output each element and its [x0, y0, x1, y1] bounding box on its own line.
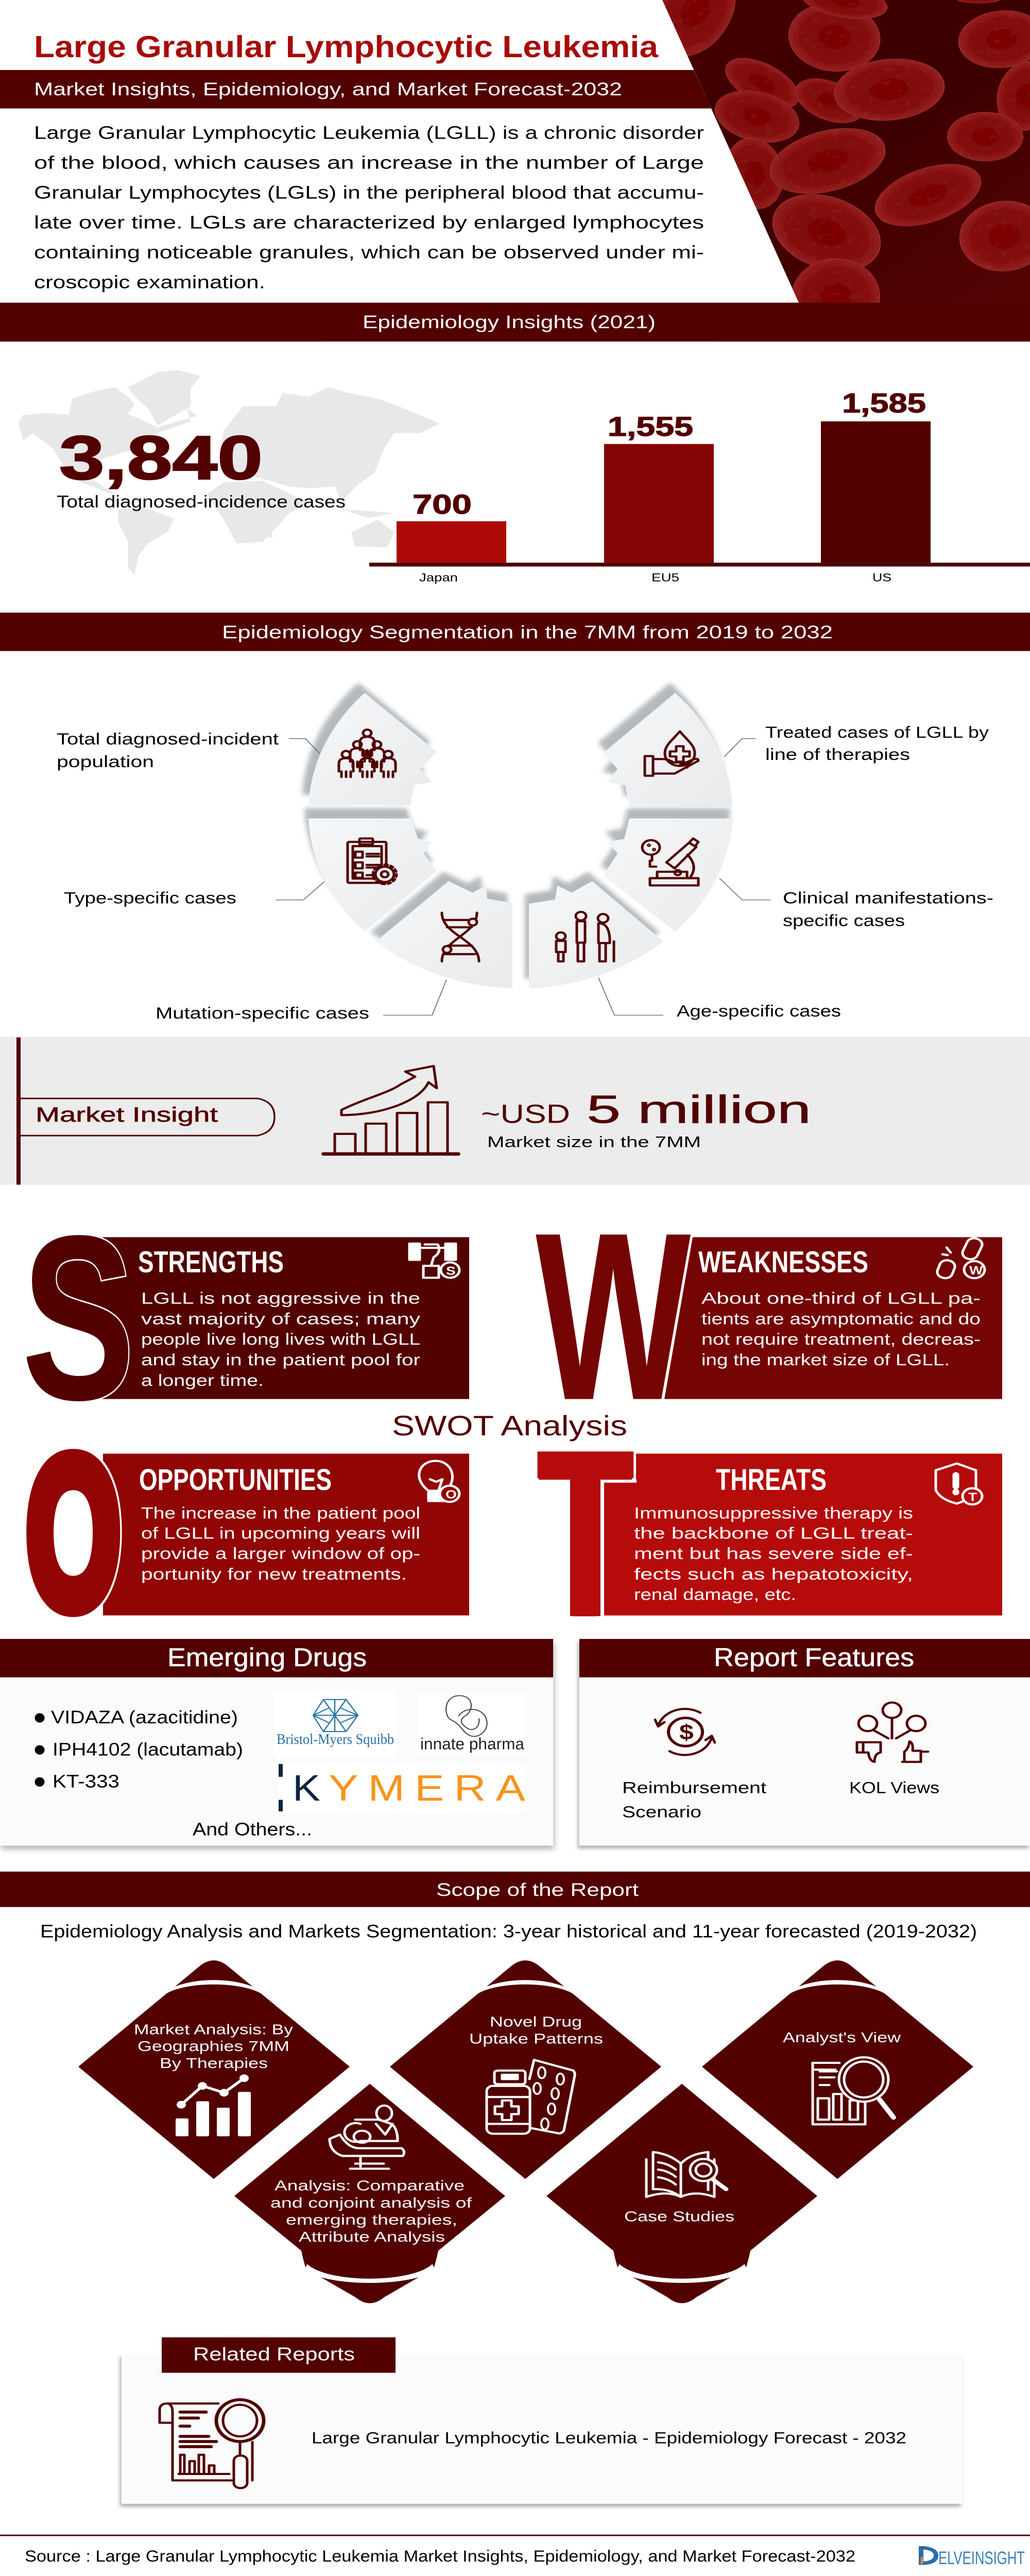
market insight tab [20, 1098, 274, 1136]
icon: reimbursement cycle: $ [679, 1720, 694, 1744]
icon: population pyramid [339, 730, 396, 777]
SWOT: strengths: LGLL is not aggressive in the [141, 1290, 420, 1308]
diamond: novel drug uptake: Uptake Patterns [469, 2031, 603, 2047]
SWOT: opportunities [26, 1414, 469, 1652]
diamond: comparative analysis: and conjoint analysis of [270, 2195, 472, 2211]
intro paragraph: late over time. LGLs are characterized by enlarged lymphocytes [34, 212, 704, 232]
labels: Total diagnosed-incident [57, 730, 279, 748]
diamond: market analysis [78, 1960, 350, 2179]
diamond: comparative analysis: Analysis: Comparative [274, 2178, 465, 2194]
SWOT: threats [536, 1400, 1002, 1668]
SWOT: weaknesses: not require treatment, decreas- [701, 1330, 981, 1348]
icon: light bulb: O [445, 1488, 457, 1501]
total cases label: Total diagnosed-incidence cases [57, 492, 346, 511]
segmented horseshoe diagram [57, 683, 993, 1022]
panel: report features: Scenario [622, 1803, 701, 1821]
logo: innate pharma [418, 1693, 525, 1755]
logo: Kymera [279, 1764, 525, 1811]
SWOT: weaknesses: WEAKNESSES [698, 1245, 868, 1279]
intro paragraph [34, 123, 704, 292]
scope subtitle: Epidemiology Analysis and Markets Segmentation: 3-year historical and 11-year forecasted (2019-2032) [40, 1922, 977, 1941]
SWOT: strengths: vast majority of cases; many [141, 1310, 421, 1328]
icon: warning shield [936, 1464, 982, 1504]
diamond: novel drug uptake: Novel Drug [490, 2014, 582, 2030]
icon: age groups family [556, 912, 614, 961]
SWOT heading: SWOT Analysis [392, 1410, 627, 1442]
SWOT: strengths: S [22, 1187, 135, 1449]
drug list: VIDAZA (azacitidine) [51, 1708, 238, 1727]
intro paragraph: of the blood, which causes an increase in the number of Large [34, 152, 704, 173]
icon: strength fist [409, 1244, 459, 1278]
header hero image: red blood cells [662, 0, 1030, 303]
SWOT: weaknesses: About one-third of LGLL pa- [701, 1290, 981, 1308]
related reports tab [162, 2337, 396, 2373]
section band: Epidemiology Segmentation [0, 613, 1030, 651]
icon: DNA [442, 913, 479, 961]
labels: specific cases [783, 911, 905, 930]
SWOT: strengths: and stay in the patient pool for [141, 1351, 420, 1369]
icon: microscope [642, 838, 698, 886]
icon: pill bottle and blister [487, 2060, 575, 2134]
subtitle band [0, 70, 711, 108]
diamond: analyst's view [702, 1960, 973, 2179]
bar chart: US [872, 572, 891, 584]
diamond: comparative analysis [234, 2084, 505, 2303]
world map background [19, 370, 440, 575]
icon: reimbursement cycle [655, 1709, 715, 1755]
SWOT: strengths: STRENGTHS [138, 1245, 284, 1279]
bar chart: EU5 [651, 572, 679, 584]
intro paragraph: Large Granular Lymphocytic Leukemia (LGLL) is a chronic disorder [34, 123, 704, 143]
drug list: IPH4102 (lacutamab) [53, 1740, 243, 1759]
labels: line of therapies [765, 745, 910, 764]
section band: Scope of the Report [0, 1872, 1030, 1907]
and others: And Others... [193, 1820, 312, 1839]
bar chart: 1,555 [608, 412, 693, 442]
panel: emerging drugs [0, 1639, 553, 1845]
logo: Kymera: K [293, 1768, 320, 1809]
bar chart: Japan [419, 572, 458, 584]
section band: Scope of the Report: Scope of the Report [436, 1879, 639, 1900]
title: Large Granular Lymphocytic Leukemia [34, 30, 659, 64]
labels: Age-specific cases [677, 1002, 841, 1020]
market value: 5 million [587, 1088, 811, 1131]
diamond: market analysis: By Therapies [160, 2056, 268, 2071]
panel: related reports [122, 2337, 963, 2504]
icon: strength fist: S [446, 1264, 456, 1278]
SWOT: weaknesses: ing the market size of LGLL. [701, 1351, 950, 1369]
emerging drugs heading: Emerging Drugs [167, 1643, 367, 1672]
icon: growth chart [323, 1066, 458, 1154]
diamond: market analysis: Geographies 7MM [138, 2039, 289, 2054]
icon: report with magnifier [160, 2400, 264, 2488]
letter T: T [536, 1400, 636, 1668]
header white panel [0, 0, 799, 303]
icon: book with magnifier [646, 2152, 726, 2197]
diamond: comparative analysis: emerging therapies, [286, 2213, 457, 2228]
SWOT: strengths [22, 1187, 469, 1449]
SWOT: threats: the backbone of LGLL treat- [634, 1524, 913, 1543]
diamond: comparative analysis: Attribute Analysis [299, 2230, 445, 2245]
intro paragraph: containing noticeable granules, which can be observed under mi- [34, 242, 704, 262]
SWOT: threats: renal damage, etc. [634, 1586, 796, 1604]
SWOT: opportunities: of LGLL in upcoming years will [141, 1524, 420, 1543]
drug list [35, 1708, 243, 1792]
labels: Mutation-specific cases [156, 1004, 369, 1022]
footer rule [0, 2535, 1030, 2536]
market size label: Market size in the 7MM [487, 1133, 701, 1151]
SWOT: threats: Immunosuppressive therapy is [634, 1504, 913, 1522]
diamond: market analysis: Market Analysis: By [134, 2022, 294, 2038]
section band: Epidemiology Segmentation: Epidemiology Segmentation in the 7MM from 2019 to 2032 [222, 622, 833, 642]
icon: checklist with gear [348, 838, 397, 884]
icon: broken link: W [969, 1264, 983, 1277]
market insight heading: Market Insight [36, 1104, 218, 1126]
icon: report with magnifier [813, 2057, 894, 2124]
market value: ~USD [481, 1099, 570, 1129]
icon: bar and line chart [176, 2074, 251, 2137]
SWOT: opportunities: OPPORTUNITIES [139, 1463, 332, 1497]
market value [481, 1088, 811, 1131]
diamond: analyst's view: Analyst's View [783, 2030, 901, 2046]
SWOT: weaknesses [536, 1183, 1002, 1450]
logo: Bristol-Myers Squibb [274, 1690, 396, 1758]
bar chart: 1,585 [842, 388, 926, 418]
SWOT: opportunities: O [26, 1414, 121, 1652]
panel: report features: KOL Views [849, 1778, 939, 1797]
bar chart: 700 [413, 489, 472, 520]
SWOT: strengths: people live long lives with LGLL [141, 1330, 420, 1348]
SWOT: opportunities: portunity for new treatments. [141, 1565, 407, 1583]
icon: blood drop in hand [645, 731, 698, 776]
diamond: novel drug uptake [390, 1960, 661, 2179]
report title: Large Granular Lymphocytic Leukemia - Epidemiology Forecast - 2032 [312, 2429, 906, 2447]
logo: Kymera: YMERA [329, 1768, 525, 1809]
SWOT: opportunities: The increase in the patient pool [141, 1504, 420, 1522]
intro paragraph: croscopic examination. [34, 272, 265, 292]
panel: market insight [0, 1037, 1030, 1184]
diamond: case studies [546, 2084, 817, 2303]
labels: Treated cases of LGLL by [765, 723, 989, 741]
SWOT: opportunities: provide a larger window of op- [141, 1545, 420, 1563]
panel: report features: Reimbursement [622, 1778, 766, 1797]
section band: Epidemiology Insights [0, 303, 1030, 342]
SWOT: threats: ment but has severe side ef- [634, 1545, 913, 1563]
logo: Bristol-Myers Squibb: Bristol-Myers Squibb [277, 1731, 394, 1747]
icon: light bulb [419, 1461, 459, 1502]
icon: warning shield: T [968, 1491, 977, 1504]
related reports tab: Related Reports [193, 2343, 355, 2365]
labels: Type-specific cases [64, 889, 236, 907]
labels [57, 723, 993, 1022]
drug list: KT-333 [53, 1772, 119, 1792]
intro paragraph: Granular Lymphocytes (LGLs) in the peripheral blood that accumu- [34, 182, 704, 202]
icon: broken link [935, 1236, 985, 1280]
section band: Epidemiology Insights: Epidemiology Insights (2021) [363, 312, 656, 332]
source line: Source : Large Granular Lymphocytic Leukemia Market Insights, Epidemiology, and Market Forecast-2032 [25, 2547, 855, 2565]
icon: patient and doctor [330, 2106, 404, 2168]
SWOT: threats: THREATS [716, 1463, 827, 1497]
report features heading: Report Features [714, 1643, 914, 1672]
SWOT: weaknesses: tients are asymptomatic and do [701, 1310, 981, 1328]
diamond: case studies: Case Studies [624, 2209, 734, 2225]
labels: population [57, 753, 154, 771]
panel: report features [579, 1639, 1030, 1845]
subtitle band: Market Insights, Epidemiology, and Market Forecast-2032 [34, 79, 622, 99]
logo: innate pharma: innate pharma [420, 1735, 525, 1753]
labels: Clinical manifestations- [783, 889, 993, 907]
SWOT: threats: fects such as hepatotoxicity, [634, 1565, 913, 1583]
SWOT: opportunities: O [26, 1414, 121, 1652]
SWOT: weaknesses: W [536, 1183, 692, 1450]
bar chart [369, 388, 1030, 584]
total cases number: 3,840 [59, 423, 263, 493]
SWOT: strengths: a longer time. [141, 1371, 264, 1389]
icon: KOL views [857, 1703, 928, 1762]
